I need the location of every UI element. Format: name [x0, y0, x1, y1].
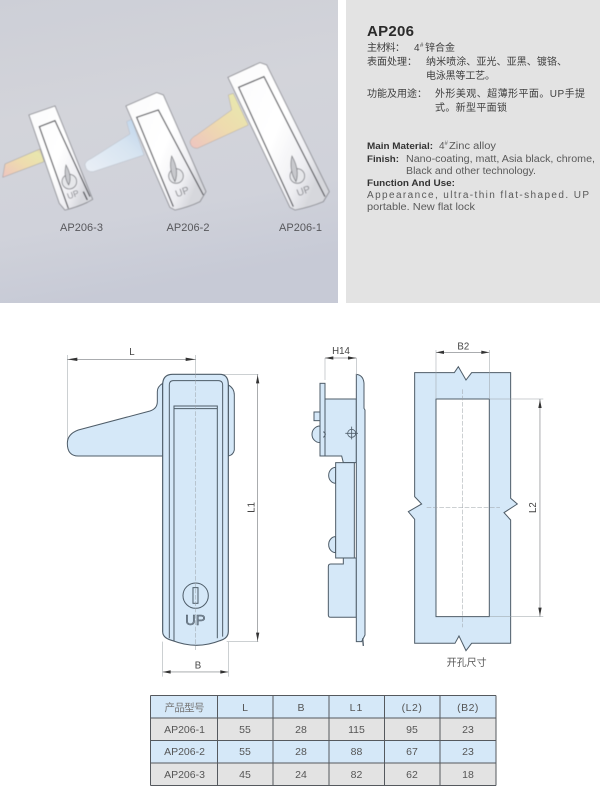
table row: AP206-3: 18	[462, 769, 474, 781]
dimension labels	[129, 347, 258, 672]
text block: Chinese specifications: #	[420, 43, 424, 49]
label: AP206-3: AP206-3	[60, 222, 103, 234]
text block: Chinese specifications: 主材料：	[367, 41, 405, 54]
dimension arrows	[325, 351, 542, 616]
text block: Chinese specifications: 4	[414, 43, 420, 54]
text block: Chinese specifications: 外形美观、超薄形平面。UP手提	[435, 87, 585, 100]
photo: lock AP206-1	[190, 63, 329, 210]
UP mark: UP	[185, 613, 206, 629]
table header: 产品型号	[164, 701, 204, 714]
table row: AP206-1: 95	[406, 724, 418, 736]
table row: AP206-1	[164, 724, 474, 736]
text block: Chinese specifications: 纳米喷涂、亚光、亚黑、镀铬、	[426, 55, 567, 68]
photo: lock AP206-2	[85, 93, 206, 210]
table header: L1	[350, 702, 363, 714]
table row: AP206-1: AP206-1	[164, 724, 205, 736]
recessed window	[174, 406, 217, 642]
panel: product photo	[0, 0, 338, 303]
table row: AP206-3	[164, 769, 474, 781]
dimension labels: H14	[332, 346, 350, 357]
dimension lines	[325, 350, 543, 627]
table: dimensions	[150, 696, 496, 786]
table header: (B2)	[457, 702, 479, 714]
text block: English specifications: Nano-coating, matt, Asia black, chrome,	[406, 154, 595, 165]
heading: AP206: AP206	[367, 23, 414, 40]
table row: AP206-2: AP206-2	[164, 746, 205, 758]
handle	[67, 383, 163, 456]
table row: AP206-2: 67	[406, 746, 418, 758]
table row: AP206-3: 82	[351, 769, 362, 781]
photo: lock AP206-2: UP	[174, 185, 191, 200]
table header: L	[242, 702, 248, 714]
text block: English specifications	[367, 141, 595, 213]
table row: AP206-2: 23	[462, 746, 474, 758]
text block: English specifications: portable. New flat lock	[367, 202, 476, 213]
text block: Chinese specifications: 表面处理：	[367, 55, 417, 68]
text block: English specifications: Main Material:	[367, 141, 433, 152]
table row: AP206-2: 28	[295, 746, 307, 758]
table header: B	[297, 702, 305, 714]
text block: English specifications: Function And Use:	[367, 178, 455, 189]
table rows background	[150, 696, 496, 786]
key cylinder	[183, 583, 208, 608]
diagram: front view of lock	[67, 347, 259, 677]
table row: AP206-1: 28	[295, 724, 307, 736]
lock body	[163, 374, 228, 645]
table row: AP206-1: 55	[239, 724, 251, 736]
table row: AP206-3: AP206-3	[164, 769, 205, 781]
table row: AP206-1: 115	[348, 724, 365, 736]
dimension labels: L2	[528, 502, 539, 513]
label: AP206-2: AP206-2	[166, 222, 210, 234]
cutout shape	[408, 367, 517, 651]
dimension lines	[67, 355, 258, 677]
table header: (L2)	[402, 702, 422, 714]
text block: Chinese specifications	[367, 41, 585, 114]
text block: Chinese specifications: 功能及用途：	[367, 87, 427, 100]
caption: cutout size: 开孔尺寸	[447, 656, 487, 669]
dimension labels: L	[129, 347, 135, 358]
diagram: side view and cutout	[312, 341, 543, 669]
dimension labels: B	[195, 661, 201, 672]
photo: lock AP206-1: UP	[295, 184, 312, 199]
text block: English specifications: 4	[439, 141, 445, 152]
table row: AP206-3: 62	[406, 769, 418, 781]
dimension labels	[332, 341, 539, 513]
right ear	[228, 385, 234, 456]
text block: English specifications: Zinc alloy	[449, 141, 496, 152]
side view	[312, 374, 365, 646]
text block: English specifications: Appearance, ultra-thin flat-shaped. UP	[367, 190, 589, 201]
text block: Chinese specifications: 式。新型平面锁	[435, 101, 507, 114]
text block: English specifications: Black and other technology.	[406, 166, 536, 177]
photo: lock AP206-3: UP	[66, 188, 81, 201]
text block: Chinese specifications: 电泳黑等工艺。	[426, 69, 495, 82]
table row: AP206-3: 24	[295, 769, 307, 781]
table row: AP206-3: 45	[239, 769, 251, 781]
text block: Chinese specifications: 锌合金	[425, 41, 455, 54]
text block: English specifications: #	[444, 141, 448, 147]
text block: English specifications: Finish:	[367, 154, 399, 165]
dimension labels: L1	[247, 502, 258, 513]
panel: specifications	[346, 0, 600, 303]
photo: lock AP206-3	[3, 106, 93, 210]
dimension arrows	[67, 358, 259, 674]
table row: AP206-1: 23	[462, 724, 474, 736]
dimension labels: B2	[457, 341, 469, 352]
table row: AP206-2	[164, 746, 474, 758]
table row: AP206-2: 55	[239, 746, 251, 758]
label: AP206-1: AP206-1	[279, 222, 322, 234]
table row: AP206-2: 88	[351, 746, 362, 758]
inner frame	[169, 381, 223, 638]
table header	[164, 701, 479, 714]
